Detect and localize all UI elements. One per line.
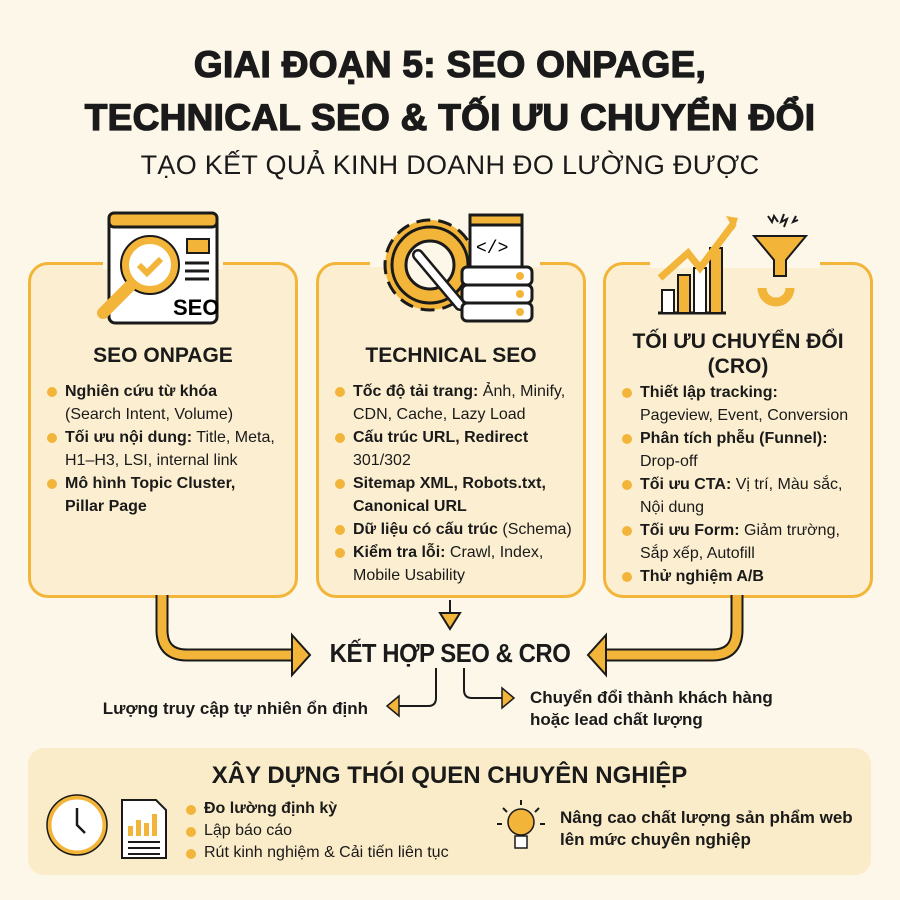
list: cro: Phân tích phễu (Funnel): xyxy=(640,430,828,447)
list: seo onpage xyxy=(47,383,275,515)
heading: cro: TỐI ƯU CHUYỂN ĐỔI xyxy=(632,330,844,353)
list: seo onpage: Tối ưu nội dung: Title, Meta, H1–H3, LSI, internal link xyxy=(65,429,275,469)
list: cro: Thử nghiệm A/B xyxy=(640,568,764,585)
text: result xyxy=(560,808,853,849)
list: technical seo: Sitemap XML, Robots.txt, Canonical URL xyxy=(353,475,546,515)
heading: seo onpage: SEO ONPAGE xyxy=(93,344,233,367)
text: outcome right: hoặc lead chất lượng xyxy=(530,710,703,729)
heading: technical seo: TECHNICAL SEO xyxy=(365,344,537,367)
list: seo onpage: Pillar Page xyxy=(65,498,147,515)
icon: gear and server: </> xyxy=(476,239,508,259)
text: outcome right xyxy=(530,688,773,729)
list: cro: Tối ưu Form: Giảm trường, Sắp xếp, Autofill xyxy=(640,522,840,562)
list: habits xyxy=(186,800,449,861)
heading: cro xyxy=(632,328,844,378)
heading: ket hop: KẾT HỢP SEO & CRO xyxy=(330,638,570,668)
subtitle: TẠO KẾT QUẢ KINH DOANH ĐO LƯỜNG ĐƯỢC xyxy=(141,150,759,180)
list: seo onpage: (Search Intent, Volume) xyxy=(65,406,233,423)
icon: chart funnel magnet xyxy=(650,214,820,314)
arrow: left to center xyxy=(156,595,744,678)
icon: report xyxy=(121,799,167,859)
list: cro: Pageview, Event, Conversion xyxy=(640,407,848,424)
list: cro xyxy=(622,384,848,585)
heading: habits: XÂY DỰNG THÓI QUEN CHUYÊN NGHIỆP xyxy=(212,762,687,789)
list: habits: Đo lường định kỳ xyxy=(204,800,337,817)
list: habits: Lập báo cáo xyxy=(204,822,292,839)
panel: cro xyxy=(603,262,873,598)
list: technical seo: Tốc độ tải trang: Ảnh, Minify, CDN, Cache, Lazy Load xyxy=(353,383,565,423)
list: cro: Drop-off xyxy=(640,453,698,470)
heading: cro: (CRO) xyxy=(708,355,768,378)
panel: seo onpage xyxy=(28,262,298,598)
icon: seo browser magnifier: SEO xyxy=(173,295,219,320)
icon: seo browser magnifier xyxy=(97,212,223,324)
list: seo onpage: Nghiên cứu từ khóa xyxy=(65,383,217,400)
title xyxy=(84,44,815,138)
list: technical seo: Kiểm tra lỗi: Crawl, Index, Mobile Usability xyxy=(353,544,543,584)
list: seo onpage: Mô hình Topic Cluster, xyxy=(65,475,235,492)
icon: bulb xyxy=(497,800,545,849)
title: GIAI ĐOẠN 5: SEO ONPAGE, xyxy=(194,44,706,85)
title: TECHNICAL SEO & TỐI ƯU CHUYỂN ĐỔI xyxy=(85,97,815,138)
list: technical seo: 301/302 xyxy=(353,452,411,469)
icon: clock xyxy=(46,794,108,856)
panel: technical seo xyxy=(316,262,586,598)
panel: habits xyxy=(28,748,871,875)
list: technical seo: Dữ liệu có cấu trúc (Schema) xyxy=(353,521,572,538)
list: cro: Thiết lập tracking: xyxy=(640,384,778,401)
list: technical seo xyxy=(335,382,572,584)
text: result: Nâng cao chất lượng sản phẩm web xyxy=(560,808,853,827)
list: cro: Tối ưu CTA: Vị trí, Màu sắc, Nội dung xyxy=(640,476,842,516)
text: outcome right: Chuyển đổi thành khách hàng xyxy=(530,688,773,707)
text: result: lên mức chuyên nghiệp xyxy=(560,830,751,849)
icon: gear and server xyxy=(370,214,540,322)
text: outcome left: Lượng truy cập tự nhiên ổn định xyxy=(103,699,368,718)
arrows: outcomes xyxy=(386,668,516,718)
list: technical seo: Cấu trúc URL, Redirect xyxy=(353,429,528,446)
list: habits: Rút kinh nghiệm & Cải tiến liên tục xyxy=(204,844,449,861)
